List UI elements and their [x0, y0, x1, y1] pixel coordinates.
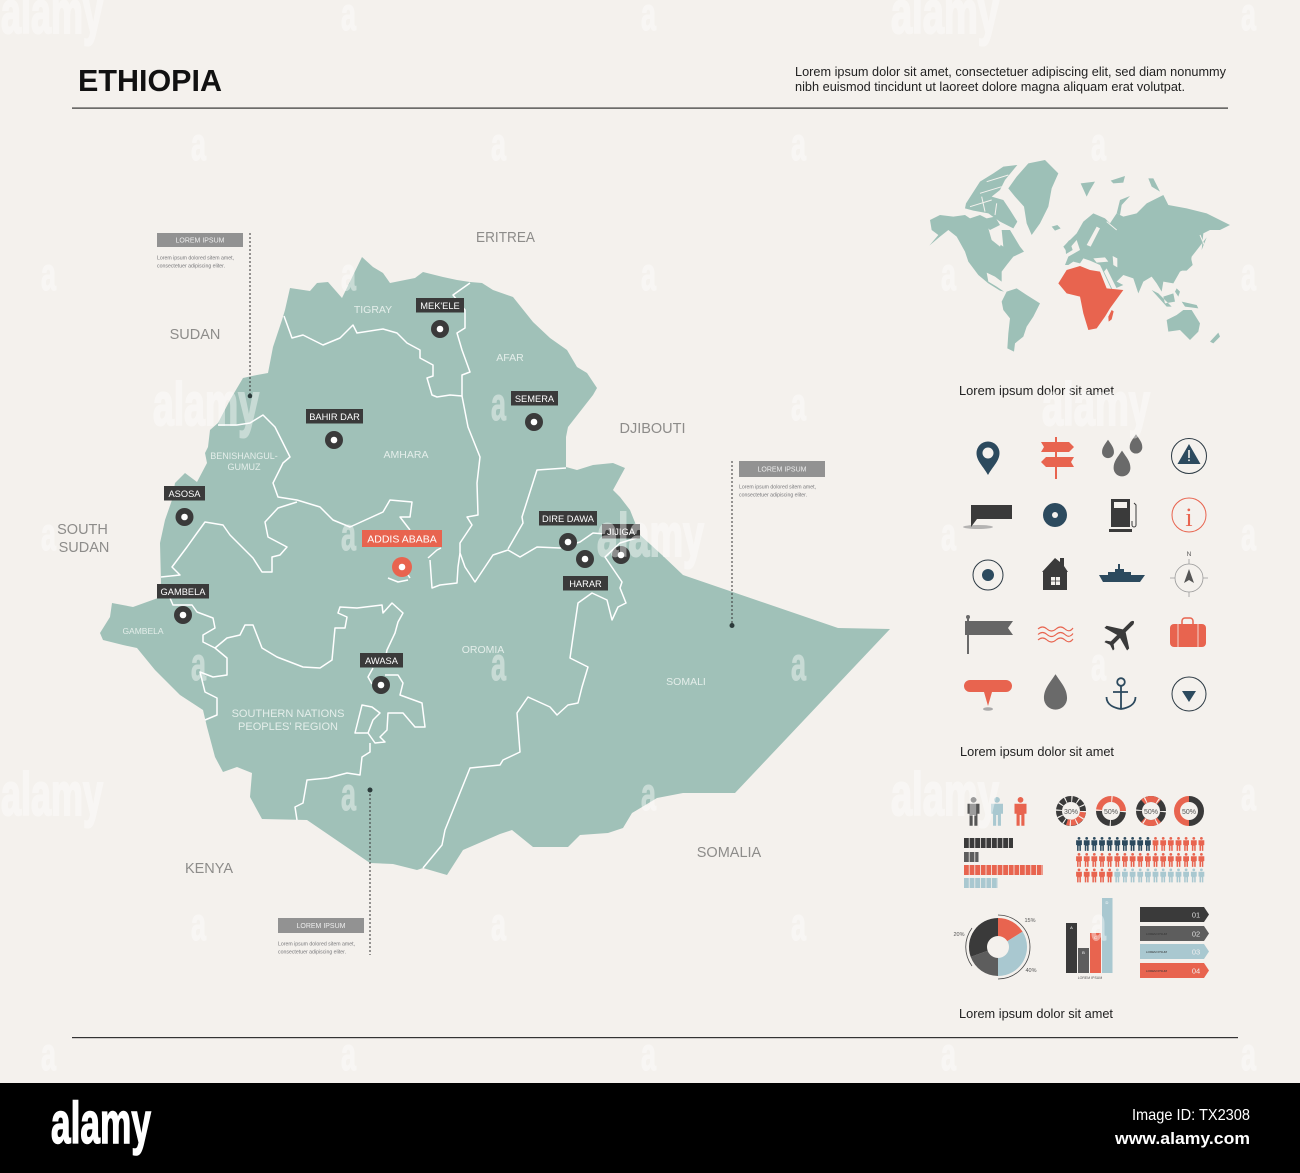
region labels: PEOPLES' REGION [238, 721, 338, 733]
icon: red marker [964, 680, 1012, 711]
bar chart: C [1094, 935, 1097, 940]
capital: Addis Ababa [362, 530, 442, 577]
region labels: OROMIA [462, 644, 504, 656]
watermarks: alamy [153, 371, 259, 438]
watermarks: a [1091, 118, 1106, 170]
city: Awasa [360, 653, 403, 694]
watermarks: a [1241, 508, 1256, 560]
Southeast Asia islands [1152, 288, 1198, 308]
callout: bottom: consectetuer adipiscing eliter. [278, 950, 346, 956]
segmented donuts: 50% [1182, 809, 1196, 816]
watermarks: a [41, 1028, 56, 1080]
watermarks: a [641, 768, 656, 820]
neighbour labels [57, 230, 762, 877]
watermarks: a [491, 898, 506, 950]
intro text: nibh euismod tincidunt ut laoreet dolore magna aliquam erat volutpat. [795, 80, 1185, 94]
arrow 04 [1140, 963, 1209, 978]
Africa [1058, 266, 1123, 330]
arrow 03: LOREM IPSUM [1146, 950, 1168, 954]
watermarks: a [791, 638, 806, 690]
watermarks: a [341, 508, 356, 560]
city: Asosa: ASOSA [168, 489, 201, 499]
city: Bahir Dar: BAHIR DAR [309, 412, 360, 422]
watermarks: a [941, 508, 956, 560]
watermarks: a [1241, 248, 1256, 300]
icon: waves [1038, 627, 1073, 642]
city: Dire Dawa [539, 511, 597, 551]
city: Dire Dawa: DIRE DAWA [542, 514, 595, 524]
watermarks: a [491, 638, 506, 690]
watermarks: a [41, 508, 56, 560]
city: Bahir Dar [306, 409, 363, 449]
neighbour labels: SUDAN [59, 540, 109, 556]
icon: suitcase [1170, 618, 1206, 647]
arrow 02: LOREM IPSUM [1146, 932, 1168, 936]
footer band [0, 1083, 1300, 1173]
segmented donuts [1059, 799, 1201, 823]
Canadian arctic [965, 165, 1017, 228]
segmented donuts: 30% [1064, 809, 1078, 816]
watermarks: a [191, 118, 206, 170]
region labels [122, 304, 706, 733]
icon: house [1042, 558, 1068, 590]
pie chart: 40% [1025, 968, 1037, 974]
intro text: Lorem ipsum dolor sit amet, consectetuer adipiscing elit, sed diam nonummy [795, 65, 1227, 79]
bar chart: LOREM IPSUM [1078, 976, 1102, 980]
icon: compass [1170, 551, 1208, 597]
segmented donuts: 50% [1104, 809, 1118, 816]
neighbour labels: SUDAN [170, 327, 220, 343]
icon: target [973, 560, 1003, 590]
city: Gambela [157, 584, 209, 624]
capital: Addis Ababa: ADDIS ABABA [367, 534, 437, 546]
region labels: AFAR [496, 352, 524, 364]
city: Harar [563, 550, 608, 590]
pie chart [953, 915, 1037, 979]
watermarks: alamy [1042, 371, 1150, 438]
icon: fuel pump [1109, 499, 1136, 532]
watermarks: alamy [891, 761, 999, 828]
callout: right: LOREM IPSUM [757, 466, 807, 474]
icon: signpost [1041, 437, 1074, 479]
icon: airplane [1097, 610, 1145, 658]
image id: Image ID: TX2308 [1132, 1107, 1250, 1124]
callout: bottom: Lorem ipsum dolored sitem amet, [278, 942, 355, 948]
arrow 04: LOREM IPSUM [1146, 969, 1168, 973]
arctic channels [970, 175, 1205, 247]
watermarks: a [341, 768, 356, 820]
New Zealand [1210, 333, 1220, 343]
icon: disc [1043, 503, 1067, 527]
callout: top left: consectetuer adipiscing eliter. [157, 264, 225, 270]
city: Mek'ele [416, 298, 464, 338]
arrow 01: 01 [1192, 910, 1200, 920]
British Isles [1065, 240, 1073, 254]
caption: world map: Lorem ipsum dolor sit amet [959, 384, 1115, 398]
icon: drop [1044, 674, 1067, 710]
Australia [1167, 310, 1200, 340]
neighbour labels: SOUTH [57, 522, 108, 538]
icon: info: i [1185, 503, 1193, 532]
callout: top left: LOREM IPSUM [175, 238, 225, 244]
watermarks: alamy [1, 761, 103, 828]
arrow 02 [1140, 926, 1209, 941]
title: ETHIOPIA [78, 63, 222, 98]
city: Jijiga: JIJIGA [607, 527, 636, 537]
icon: anchor [1106, 678, 1136, 709]
map: Ethiopia [100, 257, 890, 875]
watermarks: a [1241, 768, 1256, 820]
callout: top left: Lorem ipsum dolored sitem amet, [157, 256, 234, 262]
callout: bottom: LOREM IPSUM [296, 923, 346, 930]
bar chart: D [1106, 900, 1109, 905]
icon: speech bubble [963, 505, 1012, 529]
callout: right [730, 461, 825, 628]
Japan [1180, 257, 1193, 271]
watermarks: a [791, 118, 806, 170]
icon: down arrow [1172, 677, 1206, 711]
region labels: SOMALI [666, 676, 706, 688]
watermarks: a [491, 118, 506, 170]
caption: charts: Lorem ipsum dolor sit amet [959, 1007, 1114, 1021]
callout: top left [157, 233, 252, 398]
watermarks: a [941, 1028, 956, 1080]
watermarks: a [41, 248, 56, 300]
city: Harar: HARAR [569, 579, 602, 589]
Madagascar [1108, 310, 1114, 322]
arrow 02: 02 [1192, 930, 1200, 938]
people icons [968, 797, 1026, 826]
icon: drops [1102, 434, 1142, 476]
neighbour labels: DJIBOUTI [619, 421, 686, 437]
watermarks: a [641, 248, 656, 300]
region labels: GUMUZ [228, 462, 261, 472]
Iceland [1052, 225, 1061, 231]
Eurasia [1063, 195, 1230, 293]
watermarks: a [191, 898, 206, 950]
bar chart: A [1070, 925, 1073, 930]
watermarks: a [641, 1028, 656, 1080]
region labels: SOUTHERN NATIONS [232, 708, 344, 720]
icon: ship [1099, 564, 1145, 582]
South America [1002, 288, 1040, 352]
neighbour labels: ERITREA [476, 230, 535, 246]
pie chart: 15% [1024, 918, 1036, 924]
city: Gambela: GAMBELA [161, 587, 206, 597]
arrow 03: 03 [1192, 948, 1200, 956]
world map [929, 160, 1230, 352]
icon: info [1172, 498, 1206, 532]
bar chart [1066, 898, 1112, 980]
watermarks: a [341, 248, 356, 300]
watermarks: a [191, 638, 206, 690]
region labels: TIGRAY [354, 304, 392, 316]
pie chart: 20% [953, 932, 965, 938]
region borders [161, 283, 640, 868]
region labels: AMHARA [384, 449, 428, 461]
city: Jijiga [602, 524, 640, 564]
caption: icons: Lorem ipsum dolor sit amet [960, 745, 1115, 759]
footer logo: alamy [51, 1091, 151, 1156]
watermarks: a [941, 248, 956, 300]
intro text [795, 65, 1227, 94]
Arctic isles [1111, 176, 1160, 215]
neighbour labels: KENYA [185, 861, 233, 877]
watermarks: a [1091, 638, 1106, 690]
icon: location pin [976, 442, 1000, 475]
website: www.alamy.com [1114, 1129, 1250, 1148]
callout: bottom [278, 788, 372, 956]
city: Mek'ele: MEK'ELE [420, 301, 460, 311]
callout: right: consectetuer adipiscing eliter. [739, 492, 807, 498]
neighbour labels: SOMALIA [697, 845, 762, 861]
inner seas [988, 227, 1117, 290]
city: Asosa [164, 486, 205, 526]
Svalbard [1081, 182, 1095, 197]
watermarks: a [341, 1028, 356, 1080]
segmented donuts: 50% [1144, 809, 1158, 816]
North America [929, 215, 1024, 292]
watermarks: a [791, 378, 806, 430]
country outline [100, 257, 890, 875]
watermarks: alamy [597, 502, 704, 569]
region labels: GAMBELA [122, 626, 164, 636]
city: Awasa: AWASA [365, 656, 399, 666]
icon: warning [1172, 438, 1206, 474]
region labels: BENISHANGUL- [210, 451, 278, 461]
numbered arrows [1140, 907, 1209, 978]
segmented bars [964, 843, 1043, 883]
watermarks: a [1241, 1028, 1256, 1080]
city: Semera [511, 391, 558, 431]
arrow 04: 04 [1192, 966, 1200, 976]
icon: flag [965, 615, 1013, 654]
arrow 03 [1140, 944, 1209, 959]
watermarks: a [791, 898, 806, 950]
icon: compass: N [1187, 551, 1192, 558]
callout: right: Lorem ipsum dolored sitem amet, [739, 484, 816, 490]
people grid [1076, 837, 1204, 882]
watermarks: a [1091, 898, 1106, 950]
Greenland [1008, 160, 1058, 235]
bar chart: B [1082, 950, 1085, 955]
watermarks: a [491, 378, 506, 430]
city: Semera: SEMERA [515, 394, 555, 404]
